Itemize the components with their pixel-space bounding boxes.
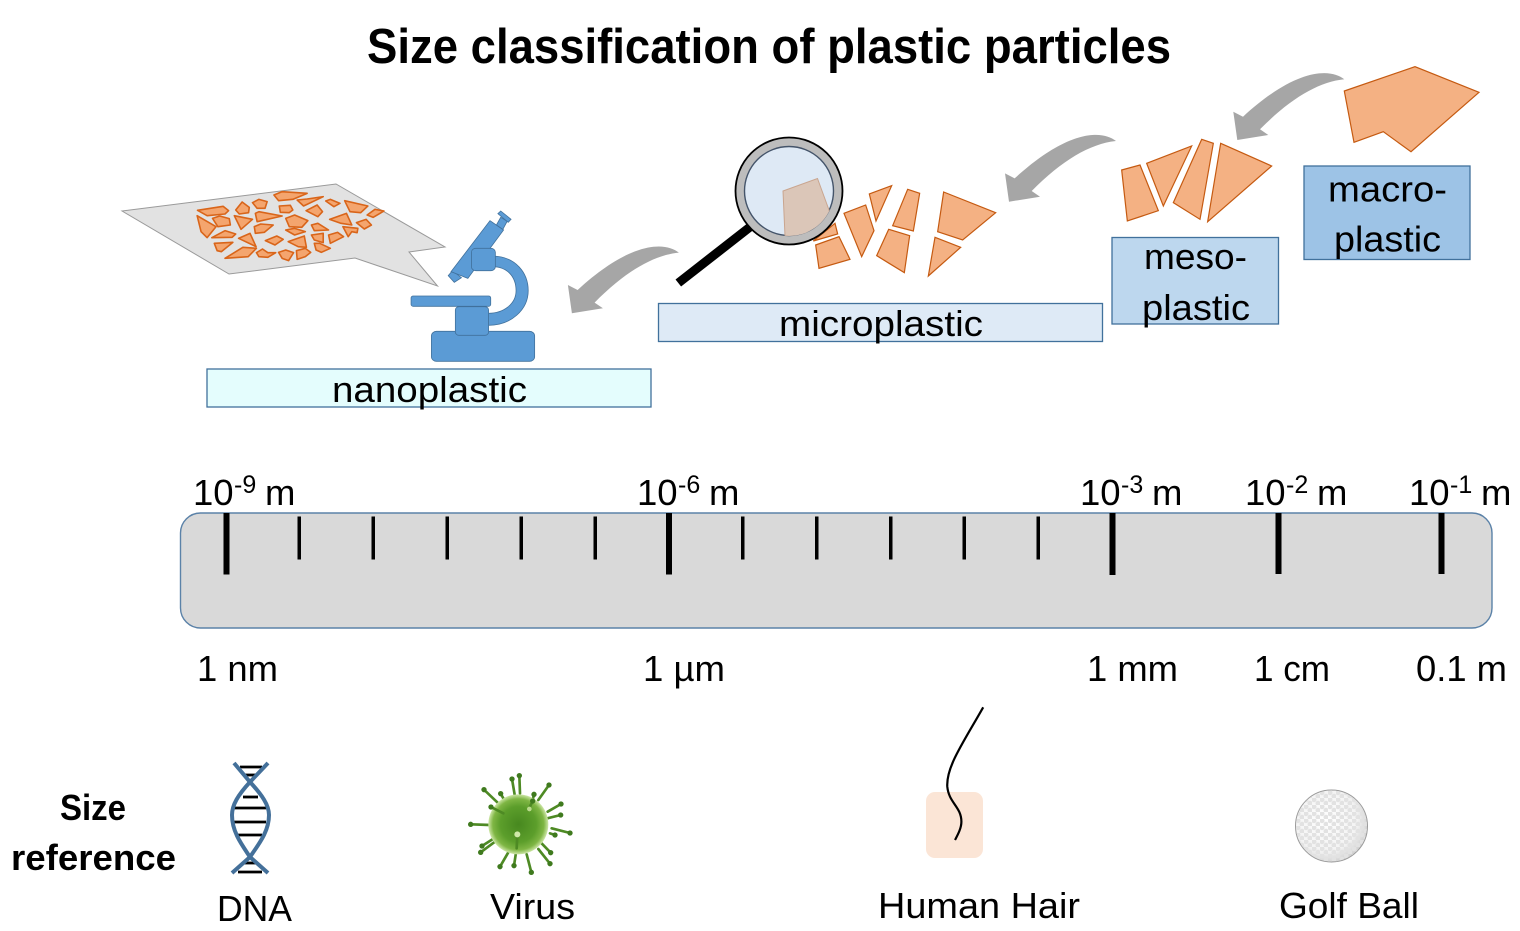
- scale label: 10^-1 m: 10: [1409, 472, 1450, 513]
- scale label: 10^-3 m: m: [1152, 472, 1182, 513]
- icon: virus: [468, 773, 573, 875]
- scale label: 10^-3 m: -3: [1121, 471, 1143, 499]
- scale label: 10^-9 m: -9: [234, 471, 256, 499]
- arrow: micro to nano: [568, 246, 679, 313]
- label: nanoplastic: [207, 369, 651, 410]
- icon: magnifying glass: [678, 138, 842, 283]
- scale label: 10^-1 m: m: [1481, 472, 1511, 513]
- label: microplastic: microplastic: [779, 303, 983, 344]
- arrow: meso to micro: [1005, 135, 1116, 202]
- unit label: 1 nm: 1 nm: [197, 648, 278, 689]
- unit label: 1 cm: 1 cm: [1254, 648, 1330, 689]
- label: nanoplastic: nanoplastic: [332, 369, 527, 410]
- unit label: 1 mm: 1 mm: [1087, 648, 1178, 689]
- label: macroplastic: [1304, 166, 1470, 260]
- icon: mesoplastic pieces: [1122, 139, 1272, 222]
- scale label: 10^-6 m: m: [709, 472, 739, 513]
- scale label: 10^-2 m: 10: [1245, 472, 1286, 513]
- major ticks: [224, 513, 1444, 575]
- scale bar: [180, 513, 1492, 628]
- scale label: 10^-6 m: 10: [637, 472, 678, 513]
- heading: size reference: [11, 787, 176, 878]
- scale label: 10^-2 m: -2: [1286, 471, 1308, 499]
- title: Size classification of plastic particles: [367, 20, 1171, 74]
- speech bubble with nanoplastic fragments: [122, 184, 445, 286]
- scale label: 10^-3 m: 10: [1080, 472, 1121, 513]
- icon: DNA helix: [232, 763, 269, 873]
- icon: microscope: [411, 211, 535, 361]
- icon: human hair: [926, 707, 983, 858]
- label: macroplastic: macro-: [1328, 168, 1447, 210]
- label: mesoplastic: meso-: [1144, 236, 1247, 277]
- label: Human Hair: Human Hair: [878, 885, 1080, 926]
- icon: golf ball: [1296, 790, 1368, 862]
- scale label: 10^-6 m: -6: [678, 471, 700, 499]
- scale label: 10^-2 m: m: [1317, 472, 1347, 513]
- heading: size reference: Size: [60, 787, 126, 828]
- minor ticks: [298, 516, 1040, 560]
- label: mesoplastic: [1112, 236, 1278, 328]
- label: microplastic: [658, 303, 1102, 344]
- icon: macroplastic piece: [1344, 67, 1479, 152]
- scale label: 10^-1 m: -1: [1450, 471, 1472, 499]
- unit label: 0.1 m: 0.1 m: [1416, 648, 1507, 689]
- unit label: 1 µm: 1 µm: [643, 648, 725, 689]
- label: Virus: Virus: [490, 886, 575, 927]
- icon: fragmented microplastic pieces: [813, 186, 996, 276]
- nanoplastic fragments: [197, 192, 384, 261]
- label: DNA: DNA: [217, 888, 293, 929]
- label: macroplastic: plastic: [1334, 218, 1441, 260]
- heading: size reference: reference: [11, 837, 176, 878]
- label: Golf Ball: Golf Ball: [1279, 885, 1419, 926]
- scale label: 10^-9 m: m: [265, 472, 295, 513]
- scale label: 10^-9 m: 10: [193, 472, 234, 513]
- arrow: macro to meso: [1233, 73, 1344, 140]
- label: mesoplastic: plastic: [1142, 287, 1250, 328]
